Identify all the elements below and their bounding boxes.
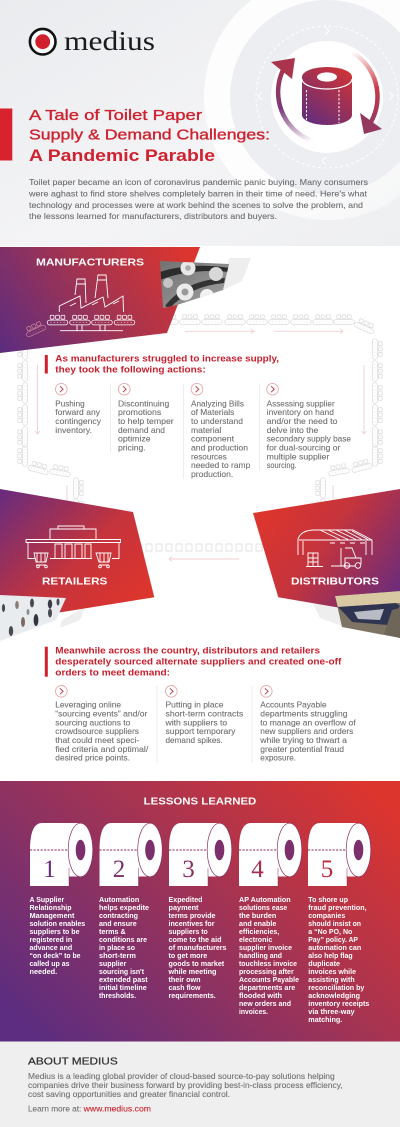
title (29, 107, 270, 165)
step: discontinuing promotions: promotions (118, 408, 161, 417)
lesson 2: supplier (99, 959, 126, 968)
heading: distributors and retailers actions (45, 645, 342, 678)
lesson 1: called up as (30, 959, 70, 968)
lesson 3: of manufacturers (168, 943, 226, 952)
step: assessing supplier inventory: secondary supply base (267, 435, 351, 444)
step: assessing supplier inventory: Assessing supplier (267, 399, 335, 408)
lesson 4: the burden (239, 911, 277, 920)
step: short-term contracts: support temporary (166, 727, 236, 736)
panel: lessons learned (0, 781, 400, 1042)
lesson 4: AP Automation (239, 895, 291, 904)
step: leveraging online sourcing: that could meet speci- (55, 736, 140, 745)
lesson 3: suppliers to (168, 927, 208, 936)
step: analyzing bills: Analyzing Bills (191, 399, 244, 408)
lesson 1: registered in (30, 935, 73, 944)
heading: retailers: RETAILERS (42, 575, 107, 587)
step: pushing forward: contingency (55, 417, 101, 426)
step: assessing supplier inventory: inventory on hand (267, 408, 334, 417)
step: discontinuing promotions (118, 383, 174, 452)
lesson 1: suppliers to be (30, 927, 80, 936)
heading: distributors: DISTRIBUTORS (291, 575, 379, 587)
lesson 4: departments are (239, 983, 295, 992)
heading: lessons learned: LESSONS LEARNED (144, 796, 257, 808)
step: short-term contracts: demand spikes. (166, 736, 223, 745)
step: accounts payable overflow: new suppliers and orders (260, 727, 353, 736)
heading: distributors and retailers actions: desperately sourced alternate suppliers and created one-off (55, 657, 342, 667)
step: assessing supplier inventory: and/or the need to (267, 417, 338, 426)
step: discontinuing promotions: demand and (118, 426, 165, 435)
lesson 1: A Supplier (30, 895, 64, 904)
lesson 4: handling and (239, 951, 282, 960)
accent bar: title (0, 108, 12, 160)
lesson 3: Expedited (168, 895, 203, 904)
step: discontinuing promotions: to help temper (118, 417, 174, 426)
lesson 5: inventory receipts (308, 999, 369, 1008)
heading: manufacturers actions (45, 354, 279, 375)
dividers (157, 686, 252, 763)
step: analyzing bills: component (191, 435, 235, 444)
logo: medius: medius (64, 26, 155, 56)
step: short-term contracts: with suppliers to (164, 718, 228, 727)
text block: company description: cost saving opportunities and greater financial control. (28, 1090, 230, 1099)
step: leveraging online sourcing: “sourcing events” and/or (55, 710, 148, 718)
step: analyzing bills: material (191, 426, 222, 435)
lesson 1: “on deck” to be (30, 951, 80, 960)
lesson 2: helps expedite (99, 903, 149, 912)
step: leveraging online sourcing: crowdsource suppliers (55, 727, 139, 736)
lesson 3: incentives for (168, 919, 215, 928)
lesson 3 (168, 823, 232, 1000)
lesson 2: and ensure (99, 919, 137, 928)
lesson 5: should insist on (308, 919, 361, 928)
graphic: toilet roll hero with cycle arrows (204, 0, 400, 220)
step: accounts payable overflow: greater potential fraud (260, 745, 344, 754)
lesson 4: efficiencies, (239, 927, 279, 936)
icon: right cycle arrow (352, 52, 382, 134)
title: Supply & Demand Challenges: (29, 126, 270, 144)
icon: left cycle arrow (271, 58, 310, 140)
lesson 4: Accounts Payable (239, 975, 299, 984)
photo: crowd of shoppers (0, 595, 66, 641)
text block: company description: Medius is a leading global provider of cloud-based source-to-pay solutions helping (28, 1072, 335, 1081)
logo: medius (30, 26, 155, 56)
photo: machinery (160, 261, 229, 308)
lesson 4: electronic (239, 935, 272, 944)
panel: manufacturers banner (0, 247, 200, 353)
lesson 2: sourcing isn't (99, 967, 144, 976)
icon: conveyor units (47, 315, 135, 325)
lesson 4 (239, 823, 302, 1016)
text: learn more link (28, 1105, 151, 1114)
panel: header background (0, 0, 400, 246)
icon: warehouse (298, 530, 372, 568)
lesson 2: 2 (113, 856, 125, 883)
photo: warehouse loading dock (335, 591, 400, 638)
lesson 1: needed. (30, 967, 57, 976)
step: accounts payable overflow: while trying to thwart a (259, 736, 348, 745)
panel: about medius (0, 1042, 400, 1127)
step: pushing forward: inventory. (55, 426, 92, 435)
title: A Tale of Toilet Paper (29, 107, 202, 124)
lesson 5: assisting with (308, 975, 355, 984)
text: learn more link: www.medius.com (83, 1105, 151, 1114)
step: discontinuing promotions: pricing. (118, 444, 146, 452)
step: leveraging online sourcing: desired price points. (55, 754, 130, 763)
step: assessing supplier inventory (267, 383, 351, 470)
lesson 5: invoices while (308, 967, 356, 976)
lesson 1: solution enables (30, 919, 85, 928)
photo: machinery shadow (223, 258, 251, 290)
step: assessing supplier inventory: delve into the (267, 426, 318, 435)
icon: toilet roll (302, 67, 352, 125)
lesson 5: companies (308, 911, 345, 920)
step: analyzing bills: of Materials (191, 408, 234, 417)
lesson 4: flooded with (239, 991, 282, 1000)
step: short-term contracts (164, 686, 243, 745)
lesson 4: 4 (251, 856, 264, 883)
lesson 4: solutions ease (239, 903, 287, 912)
lesson 2: contracting (99, 911, 138, 920)
title: A Pandemic Parable (29, 146, 215, 165)
icon: factory (59, 275, 123, 331)
step: assessing supplier inventory: sourcing. (267, 461, 297, 470)
step: leveraging online sourcing (55, 686, 149, 763)
step: accounts payable overflow: departments struggling (260, 710, 348, 718)
step: short-term contracts: Putting in place (166, 701, 224, 710)
lesson 4: processing after (239, 967, 294, 976)
lesson 2: in place so (99, 943, 135, 952)
lesson 3: cash flow (168, 983, 201, 992)
lesson 5: matching. (308, 1015, 342, 1024)
text block: introduction: technology and processes were at work behind the scenes to solve the problem, and (29, 200, 363, 210)
step: accounts payable overflow: Accounts Payable (260, 701, 327, 710)
heading: manufacturers actions: they took the following actions: (55, 365, 206, 375)
step: discontinuing promotions: optimize (118, 435, 151, 444)
lesson 5: automation can (308, 943, 362, 952)
lesson 4: new orders and (239, 999, 291, 1008)
arrows: flow direction (35, 329, 366, 561)
panel: retailers banner (0, 489, 154, 628)
text block: introduction: were aghast to find store shelves completely barren in their time of need. Here's what (28, 188, 368, 198)
icon: store (26, 526, 120, 568)
lesson 2: terms & (99, 927, 126, 936)
step: accounts payable overflow (259, 686, 356, 763)
lesson 4: invoices. (239, 1007, 268, 1016)
heading: about medius: ABOUT MEDIUS (28, 1056, 118, 1068)
step: leveraging online sourcing: Leveraging online (55, 701, 121, 710)
lesson 1 (30, 823, 93, 976)
step: pushing forward: Pushing (55, 399, 85, 408)
step: discontinuing promotions: Discontinuing (118, 399, 169, 408)
lesson 3: their own (168, 975, 201, 984)
text: learn more link: Learn more at: (28, 1105, 81, 1114)
text block: introduction (28, 177, 368, 221)
step: analyzing bills (191, 383, 251, 479)
lesson 5: Pay” policy. AP (308, 935, 358, 944)
lesson 2: Automation (99, 895, 140, 904)
step: leveraging online sourcing: sourcing auctions to (55, 718, 131, 727)
lesson 3: payment (168, 903, 199, 912)
lesson 5: also help flag (308, 951, 353, 960)
step: assessing supplier inventory: multiple supplier (267, 452, 330, 461)
step: short-term contracts: short-term contracts (166, 710, 243, 718)
lesson 5: fraud prevention, (308, 903, 367, 912)
step: leveraging online sourcing: fied criteria and optimal/ (55, 745, 149, 754)
lesson 2: short-term (99, 951, 136, 960)
step: pushing forward (55, 383, 101, 435)
dividers (110, 384, 260, 479)
lesson 3: 3 (182, 856, 195, 883)
lesson 5 (308, 823, 371, 1024)
lesson 3: to get more (168, 951, 207, 960)
lesson 5: To shore up (308, 895, 348, 904)
lesson 3: while meeting (168, 967, 217, 976)
lesson 1: advance and (30, 943, 73, 952)
panel: conveyor belt loop (18, 315, 382, 551)
text block: introduction: Toilet paper became an icon of coronavirus pandemic panic buying. Many consumers (29, 177, 368, 187)
lesson 3: goods to market (168, 959, 225, 968)
text block: company description (28, 1072, 343, 1099)
heading: distributors and retailers actions: Meanwhile across the country, distributors and retailers (55, 645, 320, 655)
lesson 2: conditions are (99, 935, 147, 944)
panel: distributors banner (253, 489, 400, 626)
lesson 1: Relationship (30, 903, 72, 912)
lesson 4: and enable (239, 919, 276, 928)
step: analyzing bills: and production (191, 444, 248, 452)
text block: introduction: the lessons learned for manufacturers, distributors and buyers. (29, 211, 277, 221)
heading: manufacturers actions: As manufacturers struggled to increase supply, (55, 354, 279, 364)
heading: distributors and retailers actions: orders to meet demand: (55, 668, 170, 678)
lesson 5: a “No PO, No (308, 927, 353, 936)
lesson 5: via three-way (308, 1007, 355, 1016)
lesson 5: 5 (321, 856, 333, 883)
step: accounts payable overflow: to manage an overflow of (260, 718, 356, 727)
step: analyzing bills: resources (191, 452, 227, 461)
lesson 5: acknowledging (308, 991, 360, 1000)
lesson 2: thresholds. (99, 991, 136, 1000)
lesson 1: 1 (43, 856, 56, 883)
lesson 4: touchless invoice (239, 959, 297, 968)
step: analyzing bills: to understand (191, 417, 243, 426)
step: analyzing bills: needed to ramp (191, 461, 251, 470)
step: assessing supplier inventory: for dual-sourcing or (267, 444, 341, 452)
lesson 3: terms provide (168, 911, 216, 920)
step: accounts payable overflow: exposure. (260, 754, 296, 763)
lesson 4: supplier invoice (239, 943, 292, 952)
lesson 2 (99, 823, 162, 1000)
lesson 2: extended past (99, 975, 148, 984)
text block: company description: companies drive their business forward by providing best-in-class process efficiency, (28, 1081, 343, 1090)
lesson 5: duplicate (308, 959, 340, 968)
lesson 3: requirements. (168, 991, 216, 1000)
step: analyzing bills: production. (191, 470, 233, 479)
lesson 5: reconciliation by (308, 983, 365, 992)
heading: manufacturers: MANUFACTURERS (36, 257, 144, 269)
step: pushing forward: forward any (55, 408, 100, 417)
lesson 2: initial timeline (99, 983, 147, 992)
lesson 1: Management (30, 911, 75, 920)
lesson 3: come to the aid (168, 935, 222, 944)
